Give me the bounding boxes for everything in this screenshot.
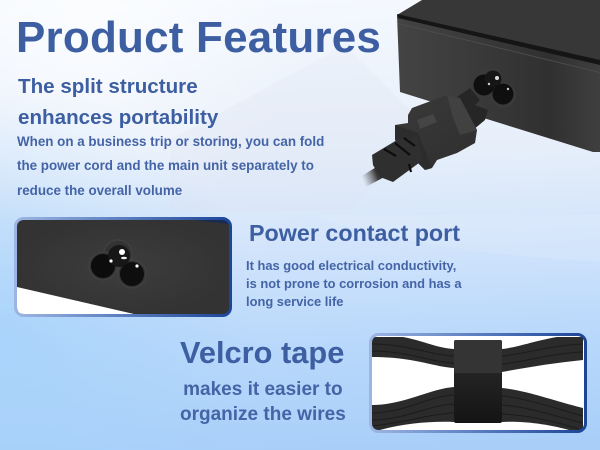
- text block: power contact description: long service life: [246, 294, 343, 309]
- heading: split structure: The split structure: [18, 75, 198, 98]
- text block: power contact description: [246, 258, 462, 309]
- text block: split structure description: reduce the overall volume: [17, 183, 182, 198]
- title: Product Features: [16, 13, 381, 62]
- heading: split structure: enhances portability: [18, 106, 218, 129]
- text block: split structure description: When on a business trip or storing, you can fold: [17, 134, 324, 149]
- power cord: [360, 163, 388, 190]
- adapter body: [397, 0, 600, 152]
- text block: split structure description: the power cord and the main unit separately to: [17, 158, 314, 173]
- heading: split structure: [18, 75, 218, 129]
- text block: velcro description: [180, 379, 346, 425]
- product image: adapter with plug: [362, 0, 600, 186]
- plug: [372, 88, 488, 182]
- panel: power contact port photo: [14, 217, 232, 317]
- text block: velcro description: organize the wires: [180, 404, 346, 425]
- text block: power contact description: It has good electrical conductivity,: [246, 258, 456, 273]
- text block: velcro description: makes it easier to: [183, 379, 343, 400]
- text block: split structure description: [17, 134, 324, 198]
- panel: velcro tape photo: [369, 333, 587, 433]
- heading: power contact port: Power contact port: [249, 220, 460, 246]
- power socket: [471, 68, 516, 108]
- heading: velcro tape: Velcro tape: [180, 335, 344, 370]
- text block: power contact description: is not prone to corrosion and has a: [246, 276, 462, 291]
